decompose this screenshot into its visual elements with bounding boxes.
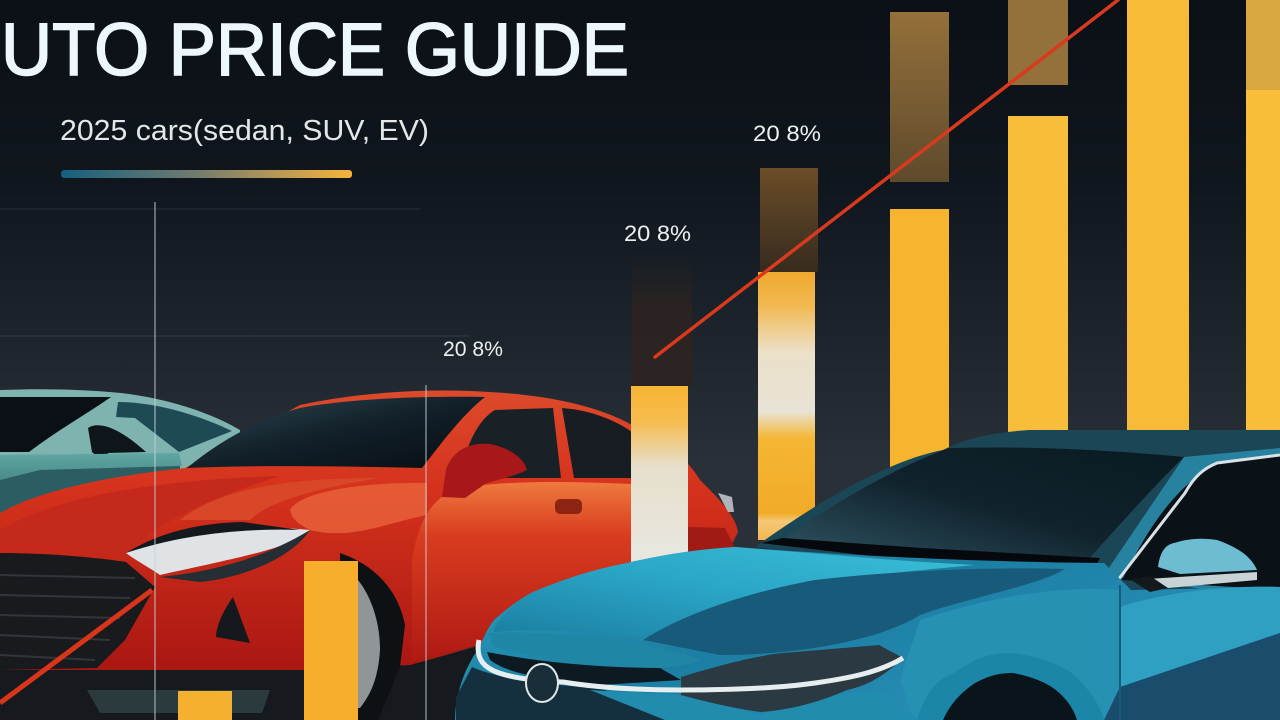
door upper: [1120, 587, 1280, 687]
ghost bar 5: [890, 12, 949, 182]
body: [455, 547, 1280, 720]
side window: [1122, 456, 1280, 590]
trend line upper: [655, 0, 1118, 357]
title: UTO PRICE GUIDE: [1, 8, 629, 91]
bar 6: [1008, 116, 1068, 436]
light strip: [478, 640, 903, 690]
window frame: [1118, 455, 1280, 580]
blue car: [455, 430, 1280, 720]
bar 3: [631, 386, 688, 564]
wheel arch: [917, 653, 1104, 720]
door seam: [1119, 585, 1121, 720]
rear light: [718, 493, 734, 512]
cowl: [761, 538, 1100, 568]
wheel arch and tyre: [340, 553, 405, 720]
red car: [0, 391, 738, 720]
dark band: [487, 652, 681, 685]
value label 3: 20 8%: [753, 121, 821, 146]
grille: [456, 667, 670, 720]
value label 2: 20 8%: [624, 221, 691, 246]
lower bar 2: [304, 561, 358, 720]
hood: [494, 547, 975, 640]
headlight: [126, 528, 310, 575]
subtitle gradient bar: [61, 170, 352, 178]
bar 7: [1127, 0, 1189, 432]
trend line lower: [0, 590, 152, 703]
hood shading: [0, 476, 280, 553]
ghost bar 3: [632, 255, 692, 386]
hood crease: [643, 568, 1065, 655]
fog lamp: [216, 597, 250, 643]
overlay vertical lines: [155, 202, 426, 720]
lower bumper: [590, 690, 917, 720]
door panel: [412, 482, 632, 660]
teal car: [0, 389, 240, 530]
windshield: [187, 397, 485, 468]
body: [0, 391, 738, 672]
side window front: [462, 408, 561, 478]
bar 4: [758, 272, 815, 540]
fender: [900, 589, 1120, 720]
lower bar 1: [178, 691, 232, 720]
mirror: [1158, 539, 1257, 574]
roof: [755, 430, 1280, 600]
door lower shade: [1104, 633, 1280, 720]
logo: [526, 664, 558, 702]
bar 5: [890, 209, 949, 479]
ghost bar 4: [760, 168, 818, 272]
side window rear: [562, 408, 632, 478]
ghost bar 6: [1008, 0, 1068, 85]
lower dark bumper: [0, 643, 490, 720]
windshield: [783, 447, 1184, 560]
value label 1: 20 8%: [443, 338, 503, 361]
chart gridlines: [0, 209, 470, 336]
pillar: [1104, 448, 1280, 600]
bar chart: [632, 0, 1280, 540]
headlight: [681, 645, 903, 712]
subtitle: 2025 cars(sedan, SUV, EV): [60, 115, 429, 147]
wheel spokes: [358, 580, 380, 708]
bar 8: [1246, 0, 1280, 90]
fender highlight: [290, 483, 427, 533]
door handle: [555, 499, 582, 514]
grille: [0, 553, 155, 670]
hood lip: [488, 632, 702, 668]
mirror: [442, 444, 527, 498]
